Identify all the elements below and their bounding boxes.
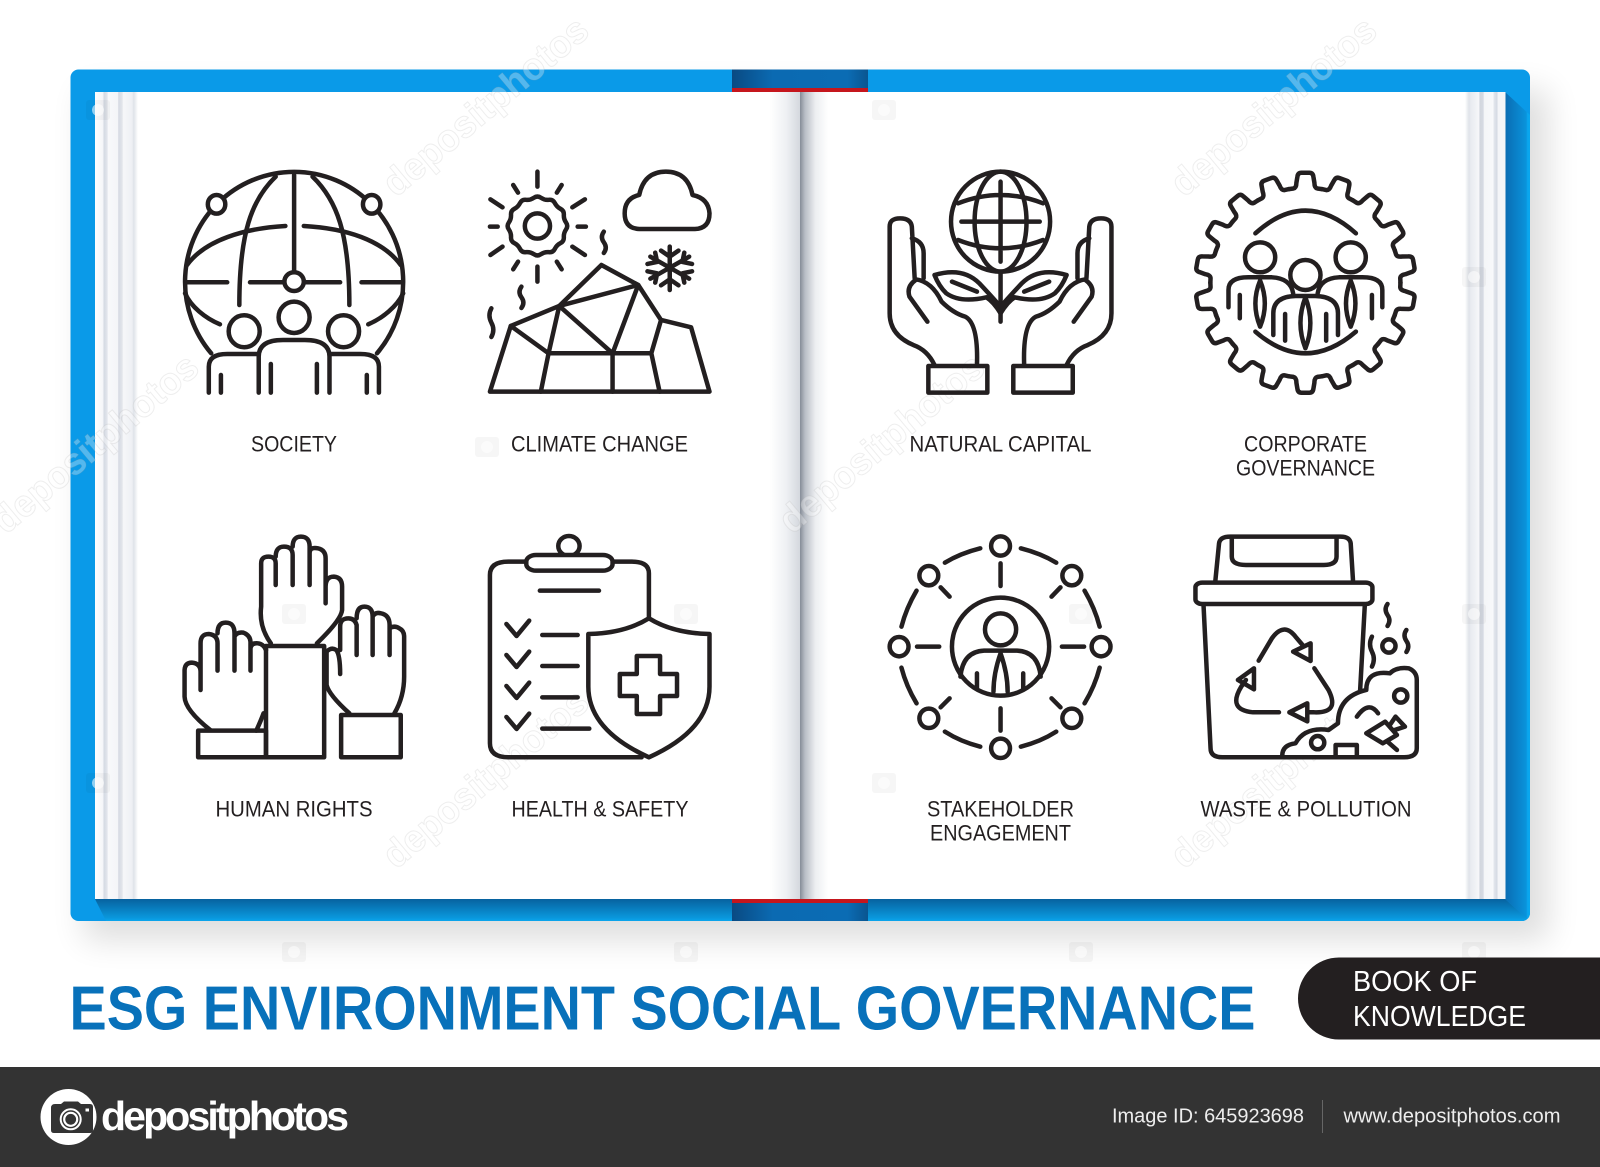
book shadow [84, 90, 1548, 940]
panel: waste and pollution [1195, 537, 1417, 822]
icon: recycling bin with trash pile [1195, 537, 1417, 757]
image id: Image ID: 645923698 [1112, 1104, 1304, 1128]
panel: stakeholder engagement [890, 536, 1111, 846]
icon: hands holding globe plant [890, 172, 1111, 393]
icon: gear ring [1194, 173, 1417, 393]
watermark: depositphotos [1163, 9, 1385, 205]
label: human rights: HUMAN RIGHTS [216, 796, 372, 822]
panel: corporate governance [1194, 173, 1417, 480]
label: society: SOCIETY [251, 432, 337, 456]
label: corporate governance: GOVERNANCE [1236, 456, 1375, 480]
icon: network around person [890, 536, 1111, 758]
panel: society [185, 172, 403, 456]
book pages [95, 92, 1506, 899]
panel: natural capital [890, 172, 1111, 456]
icon: business team [1228, 211, 1382, 353]
watermark: depositphotos [375, 9, 597, 205]
label: stakeholder engagement: STAKEHOLDER [927, 796, 1074, 822]
book cover [70, 70, 1530, 921]
label: corporate governance [1236, 432, 1375, 480]
watermark [0, 9, 1385, 877]
label: corporate governance: CORPORATE [1244, 432, 1367, 456]
icon: clipboard and shield [490, 536, 709, 757]
icon: camera logo [40, 1089, 96, 1145]
badge: book of knowledge: BOOK OF [1353, 966, 1477, 998]
website: www.depositphotos.com [1343, 1104, 1560, 1128]
badge: book of knowledge [1298, 957, 1600, 1040]
icon: sun, cloud, snowflake and iceberg [489, 172, 709, 392]
logo wordmark: depositphotos [101, 1093, 349, 1139]
watermark: depositphotos [771, 346, 993, 542]
label: health and safety: HEALTH & SAFETY [512, 796, 688, 822]
watermark: depositphotos [1163, 681, 1385, 877]
panel: climate change [489, 172, 709, 456]
panel: health and safety [490, 536, 709, 822]
watermark camera marks [86, 100, 1486, 962]
label: natural capital: NATURAL CAPITAL [910, 432, 1092, 456]
footer bar [0, 1067, 1600, 1167]
label: stakeholder engagement: ENGAGEMENT [930, 820, 1071, 846]
watermark: depositphotos [375, 681, 597, 877]
label: stakeholder engagement [927, 796, 1074, 846]
title: ESG ENVIRONMENT SOCIAL GOVERNANCE [70, 974, 1256, 1044]
icon: globe with people [185, 172, 403, 393]
label: climate change: CLIMATE CHANGE [511, 432, 688, 456]
badge: book of knowledge: KNOWLEDGE [1353, 1001, 1526, 1033]
panel: human rights [185, 537, 404, 822]
icon: three raised hands [185, 537, 404, 757]
label: waste and pollution: WASTE & POLLUTION [1200, 796, 1412, 822]
